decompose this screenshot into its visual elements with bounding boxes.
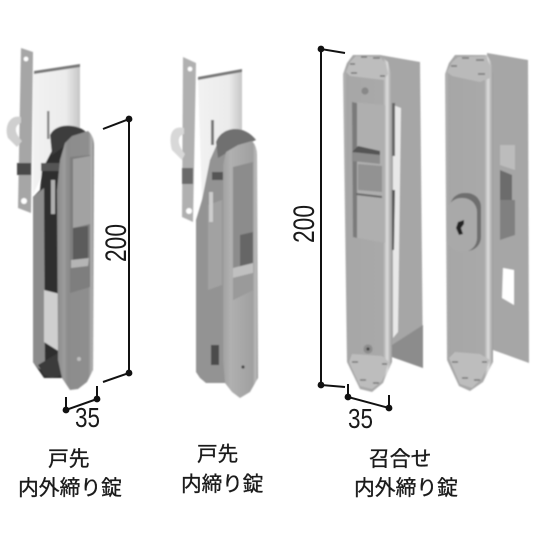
lock 2: door-edge inner lock photo bbox=[170, 57, 258, 398]
lock 4: meeting-stile lock, key side photo bbox=[445, 53, 529, 391]
mounting plate bbox=[18, 48, 33, 213]
caption: lock 2 bbox=[181, 443, 263, 496]
finger recess bbox=[70, 155, 90, 293]
label: 35 (lock 1): 35 bbox=[75, 402, 100, 433]
latch handle bbox=[352, 152, 380, 164]
mounting plate bbox=[182, 57, 196, 222]
faceplate bbox=[57, 131, 94, 390]
bottom ornament bbox=[449, 352, 490, 388]
faceplate bbox=[445, 55, 493, 391]
hook bbox=[170, 127, 185, 160]
top ornament bbox=[447, 56, 490, 82]
finger recess bbox=[233, 162, 253, 300]
keyhole bbox=[456, 220, 464, 235]
dimension: lock 1 height bbox=[103, 116, 132, 382]
hook bbox=[7, 117, 22, 147]
bottom ornament bbox=[349, 354, 389, 389]
caption: locks 3 and 4: 内外締り錠 bbox=[354, 477, 458, 500]
top ornament bbox=[346, 56, 388, 80]
lock 1: door-edge inner/outer lock photo bbox=[7, 48, 94, 390]
white case bbox=[33, 65, 80, 195]
caption: lock 2: 戸先 bbox=[197, 443, 238, 466]
dimension: lock 3 height bbox=[318, 46, 345, 388]
caption: lock 1 bbox=[18, 448, 122, 500]
label: 200 (lock 1): 200 bbox=[100, 224, 133, 262]
key cylinder plate bbox=[450, 193, 481, 251]
faceplate bbox=[343, 55, 392, 392]
caption: lock 2: 内締り錠 bbox=[181, 473, 263, 496]
caption: lock 1: 戸先 bbox=[48, 448, 90, 471]
mechanism bbox=[196, 133, 228, 383]
faceplate bbox=[223, 141, 258, 398]
label: 200 (lock 3): 200 bbox=[288, 205, 321, 243]
rear flange bbox=[487, 53, 529, 363]
dimension: lock 3 width bbox=[345, 384, 392, 411]
rear flange bbox=[380, 55, 423, 368]
caption: locks 3 and 4 bbox=[354, 448, 458, 500]
white case bbox=[198, 70, 242, 200]
dimension: lock 1 width bbox=[63, 386, 100, 413]
caption: lock 1: 内外締り錠 bbox=[18, 477, 122, 500]
label: 35 (lock 3): 35 bbox=[348, 403, 373, 434]
strike cutout bbox=[502, 268, 514, 305]
caption: locks 3 and 4: 召合せ bbox=[369, 448, 431, 471]
lock 3: meeting-stile lock, inner side photo bbox=[343, 55, 423, 392]
mechanism bbox=[33, 135, 66, 378]
finger recess bbox=[352, 102, 385, 243]
